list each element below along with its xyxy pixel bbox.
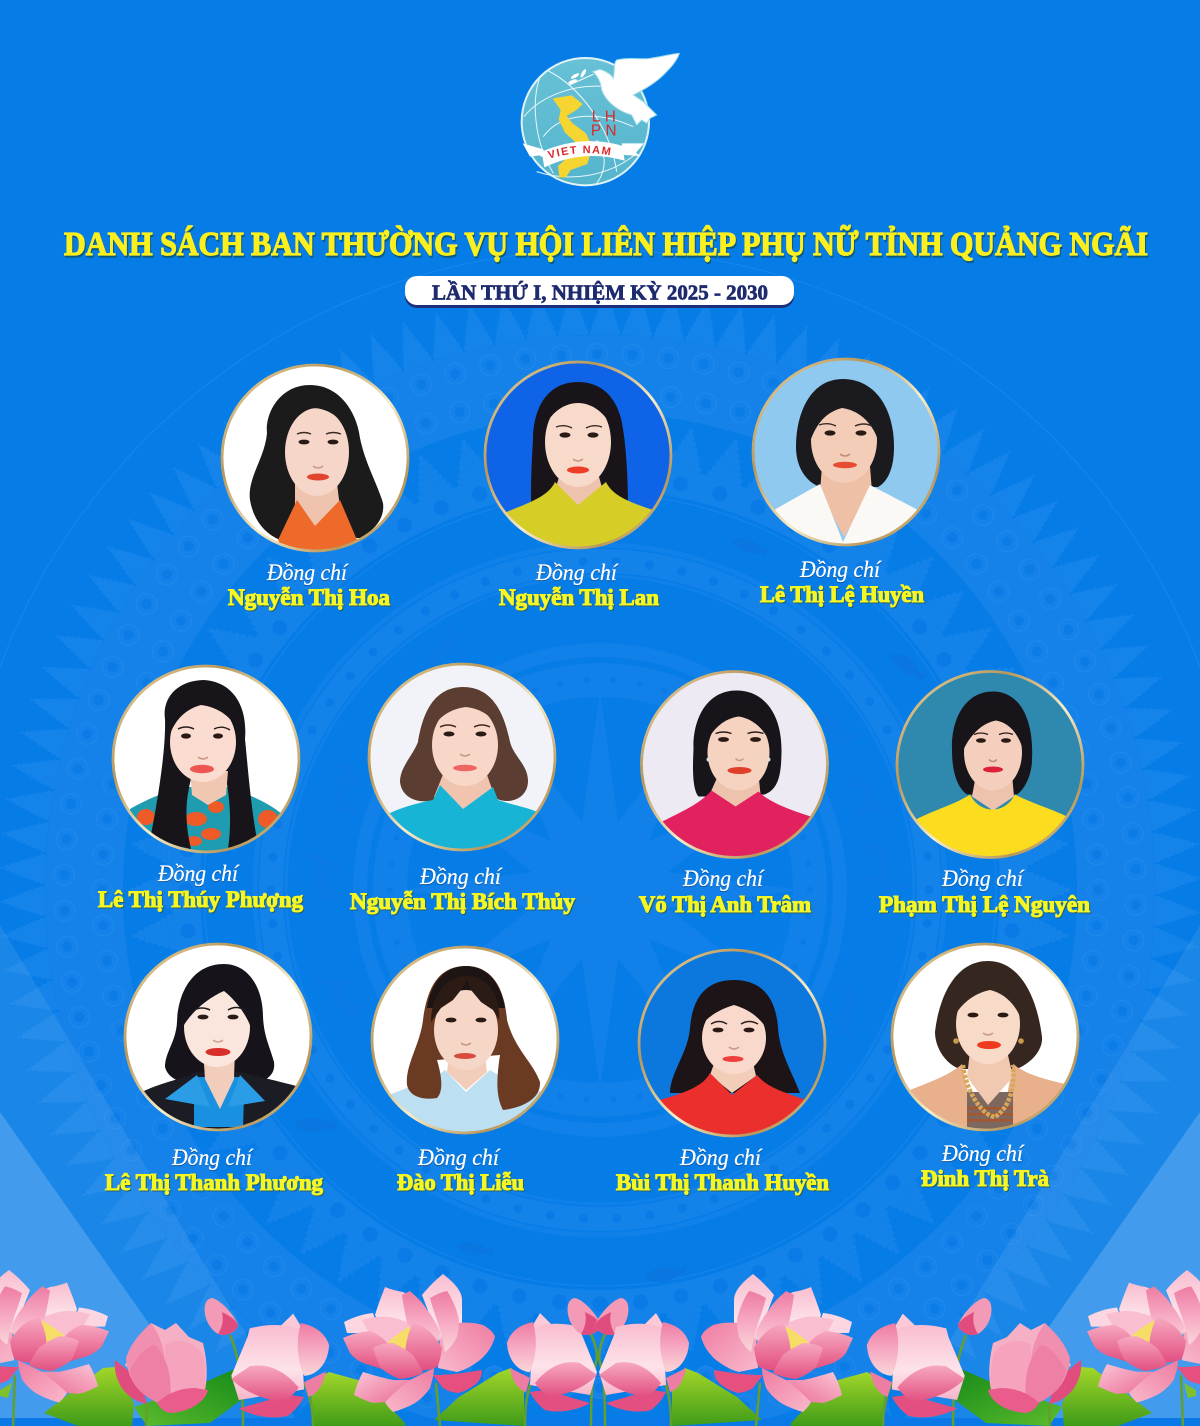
- portrait: [640, 670, 830, 860]
- honorific: Đồng chí: [157, 861, 240, 886]
- honorific: Đồng chí: [535, 560, 619, 585]
- name: Bùi Thị Thanh Huyền: [616, 1170, 829, 1195]
- bottom strip: [0, 1418, 1200, 1426]
- portrait: [220, 363, 410, 553]
- name: Phạm Thị Lệ Nguyên: [879, 892, 1090, 917]
- name: Đào Thị Liễu: [397, 1170, 524, 1195]
- member: Lê Thị Thanh Phương: [105, 942, 323, 1195]
- logo: Vietnam Women's Union: [520, 52, 680, 186]
- Vietnam map: [553, 95, 591, 177]
- portrait: [483, 360, 673, 550]
- member: Bùi Thị Thanh Huyền: [616, 948, 829, 1195]
- lotus flowers row: [0, 1270, 1200, 1417]
- name: Nguyễn Thị Lan: [499, 585, 659, 610]
- light rays bottom left: [0, 925, 300, 1426]
- portrait: [123, 942, 313, 1132]
- member: Nguyễn Thị Lan: [483, 360, 673, 610]
- portrait: [637, 948, 827, 1138]
- member: Nguyễn Thị Hoa: [220, 363, 410, 610]
- light rays bottom right: [900, 925, 1200, 1426]
- honorific: Đồng chí: [266, 560, 349, 585]
- name: Nguyễn Thị Bích Thủy: [350, 889, 576, 914]
- olive branch: [568, 68, 593, 85]
- honorific: Đồng chí: [799, 557, 882, 582]
- term pill: [405, 276, 794, 308]
- member: Đinh Thị Trà: [890, 942, 1080, 1191]
- honorific: Đồng chí: [941, 1141, 1025, 1166]
- term pill: LẦN THỨ I, NHIỆM KỲ 2025 - 2030: [432, 280, 768, 304]
- member: Võ Thị Anh Trâm: [639, 670, 830, 917]
- member: Phạm Thị Lệ Nguyên: [879, 670, 1090, 917]
- member: Lê Thị Lệ Huyền: [751, 357, 941, 607]
- portrait: [751, 357, 941, 547]
- LHPN letters: H: [605, 108, 616, 125]
- dove: [593, 53, 679, 125]
- member: Lê Thị Thúy Phượng: [98, 664, 303, 912]
- honorific: Đồng chí: [417, 1145, 501, 1170]
- lotus garden: leaves and stems right: [599, 1330, 1196, 1426]
- portrait: [370, 945, 560, 1135]
- portrait: [111, 664, 301, 854]
- member: Nguyễn Thị Bích Thủy: [350, 662, 576, 914]
- honorific: Đồng chí: [171, 1145, 254, 1170]
- name: Lê Thị Lệ Huyền: [760, 582, 924, 607]
- LHPN letters: L: [592, 108, 601, 125]
- ribbon text: VIET NAM: [547, 146, 611, 158]
- name: Lê Thị Thanh Phương: [105, 1170, 323, 1195]
- LHPN letters: P: [591, 122, 601, 139]
- name: Đinh Thị Trà: [921, 1166, 1049, 1191]
- honorific: Đồng chí: [682, 866, 765, 891]
- honorific: Đồng chí: [679, 1145, 763, 1170]
- name: Lê Thị Thúy Phượng: [98, 887, 303, 912]
- member: Đào Thị Liễu: [370, 945, 560, 1195]
- portrait: [895, 670, 1085, 860]
- name: Nguyễn Thị Hoa: [228, 585, 390, 610]
- LHPN letters: [591, 108, 617, 139]
- ribbon: [523, 143, 644, 158]
- honorific: Đồng chí: [941, 866, 1025, 891]
- name: Võ Thị Anh Trâm: [639, 892, 811, 917]
- LHPN letters: N: [605, 122, 617, 139]
- portrait: [890, 942, 1080, 1132]
- portrait: [367, 662, 557, 852]
- lotus garden: leaves and stems left: [0, 1330, 597, 1426]
- honorific: Đồng chí: [419, 864, 503, 889]
